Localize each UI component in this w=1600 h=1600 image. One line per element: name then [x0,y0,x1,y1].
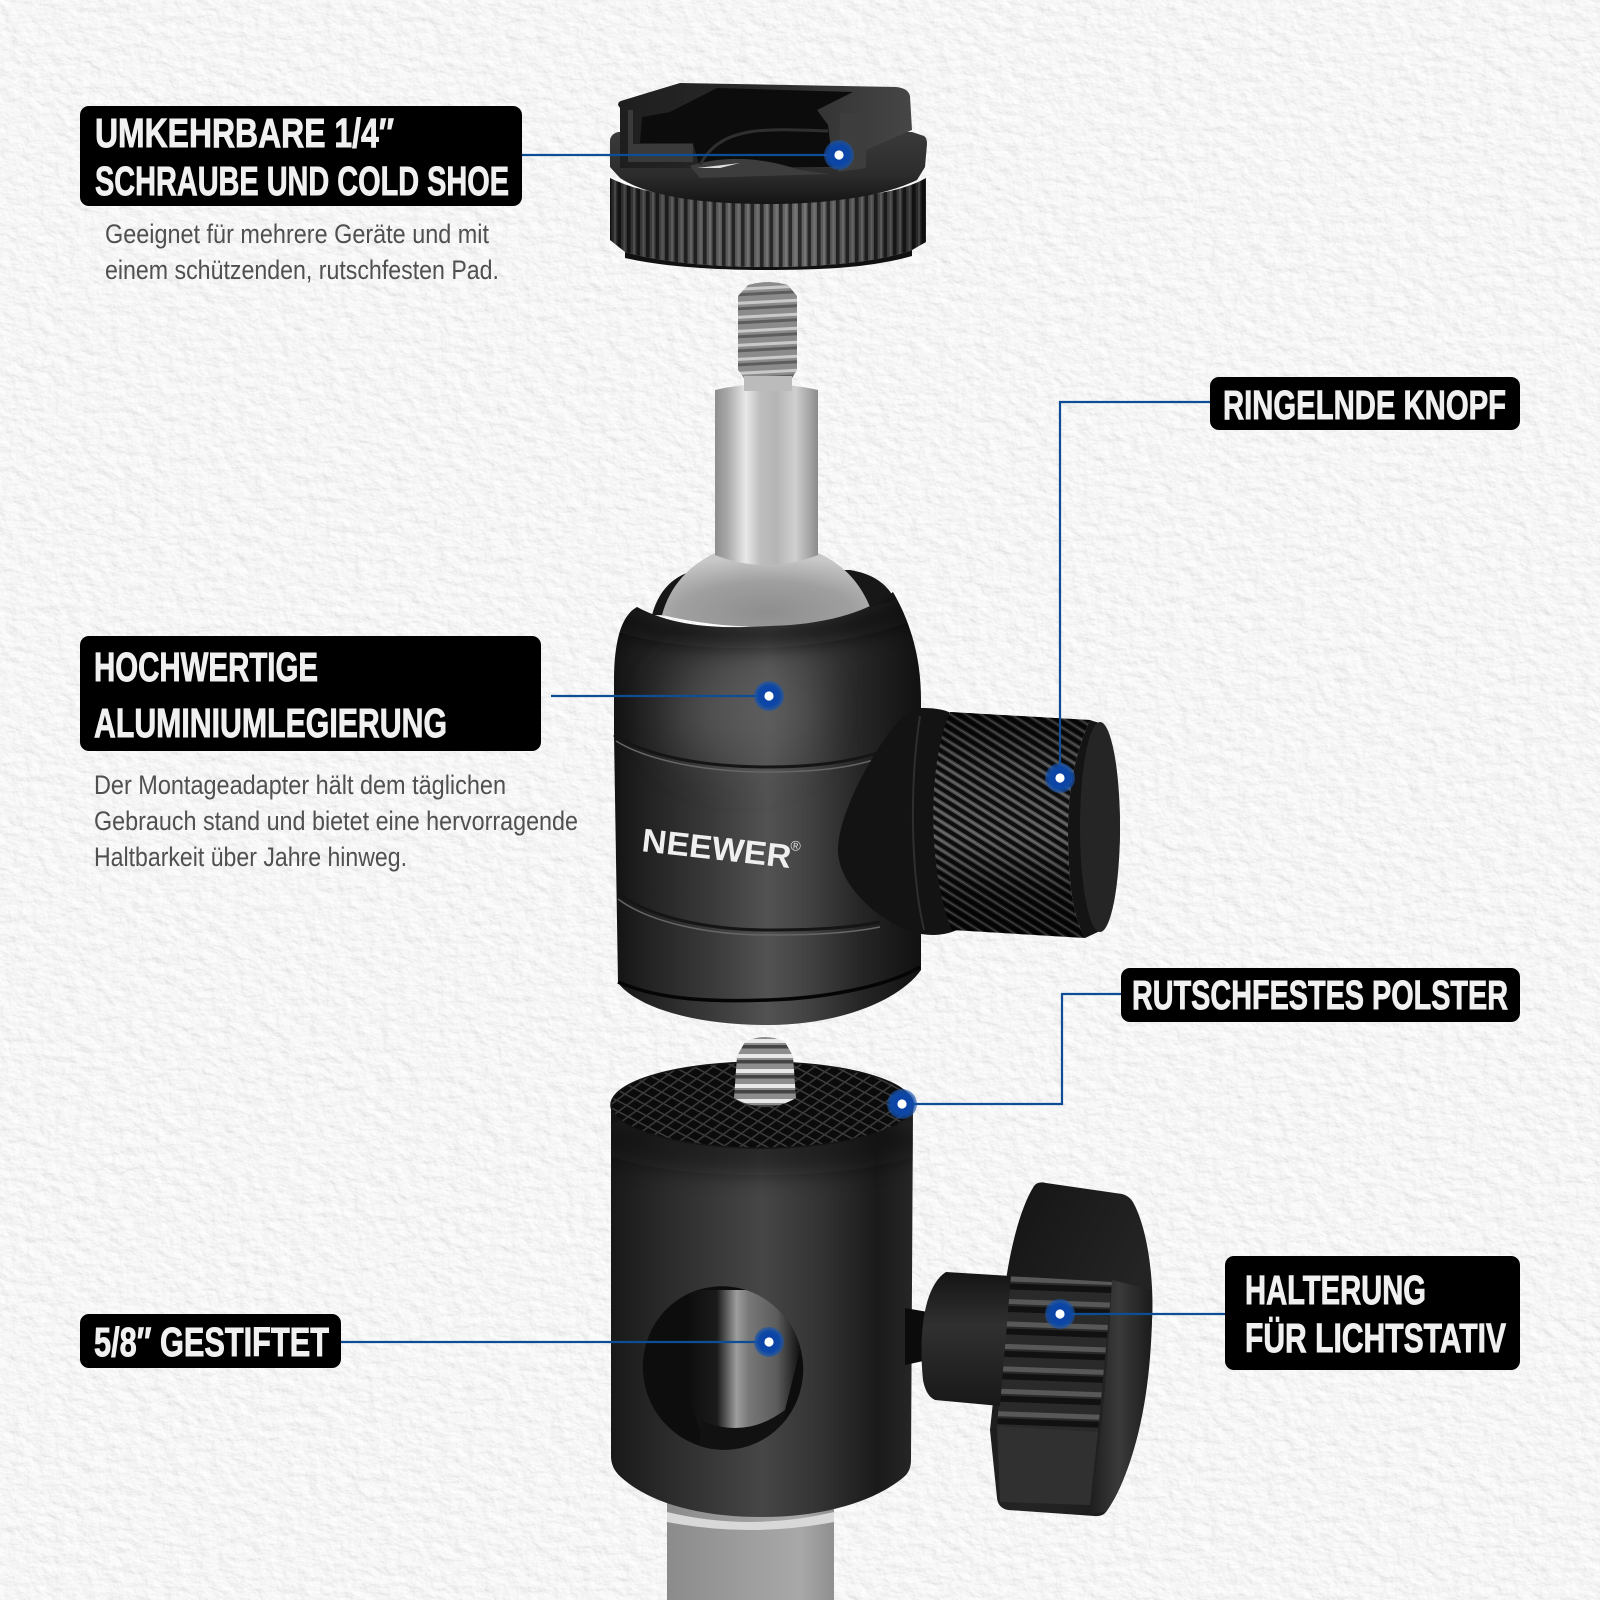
body [614,592,921,1025]
lower groove [618,893,880,930]
product: lock knob [921,1182,1152,1516]
product: cold shoe adapter [610,83,927,270]
marker: pad [887,1089,917,1119]
knob ribs [997,1276,1112,1432]
upper groove [614,735,880,767]
threaded bolt [738,282,797,378]
rail highlight [628,110,693,162]
mounting stud [734,1037,796,1107]
label: reversible screw and cold shoe [80,106,522,206]
callout line: cold shoe [522,154,839,156]
marker: cold shoe [824,140,854,170]
callout line: pad [902,994,1121,1104]
cylinder body [611,1105,913,1517]
label: aluminium alloy [80,636,541,751]
text: cold shoe description: einem schützenden, rutschfesten Pad. [105,255,499,285]
callout line: aluminium [551,695,769,697]
label: reversible screw and cold shoe: SCHRAUBE UND COLD SHOE [95,158,509,204]
body shading [600,600,930,762]
knob rim [1086,1280,1152,1514]
text: cold shoe description [105,219,499,285]
5/8 inch hole [640,1285,810,1455]
text: aluminium description: Haltbarkeit über Jahre hinweg. [94,842,407,872]
knob collar [838,708,957,935]
label: reversible screw and cold shoe: UMKEHRBARE 1/4″ [95,110,394,156]
label: aluminium alloy: ALUMINIUMLEGIERUNG [94,700,447,746]
base gap [618,967,920,1001]
silver post [715,384,818,565]
shoe opening [640,88,853,168]
ball [662,553,872,627]
marker: 5/8 pin [754,1327,784,1357]
knurled grip [933,712,1090,938]
socket back rim [652,570,903,620]
knob cap [1068,720,1120,938]
label: aluminium alloy: HOCHWERTIGE [94,644,318,690]
label: light stand mount: FÜR LICHTSTATIV [1245,1315,1506,1361]
label: ring knob [1210,377,1520,430]
label: 5/8 inch pin: 5/8″ GESTIFTET [94,1319,329,1365]
NEEWER logo: ® [790,837,802,854]
NEEWER logo: NEEWER [640,821,794,875]
collar [610,132,927,204]
callout line: stand mount [1060,1313,1225,1315]
marker: stand mount [1045,1299,1075,1329]
text: aluminium description: Gebrauch stand und bietet eine hervorragende [94,806,578,836]
marker: knob [1045,763,1075,793]
label: light stand mount: HALTERUNG [1245,1267,1426,1313]
product: light stand pole [667,1500,834,1600]
text: cold shoe description: Geeignet für mehrere Geräte und mit [105,219,489,249]
label: 5/8 inch pin [80,1314,341,1368]
anti-slip pad [611,1062,913,1148]
side screw [905,1308,928,1365]
text: aluminium description: Der Montageadapter hält dem täglichen [94,770,506,800]
cylinder shading [626,1118,913,1182]
callout line: knob [1060,402,1210,778]
knob neck [921,1272,1011,1406]
text: aluminium description [94,770,578,872]
knurled ring [610,178,926,267]
marker: aluminium [754,681,784,711]
label: light stand mount [1225,1256,1520,1370]
shoe top plate [618,83,912,168]
product: lower cylinder mount [592,1037,932,1517]
callout line: 5/8 pin [341,1341,769,1343]
product: ball head [600,282,930,1025]
knob head [990,1182,1152,1516]
product: ball head knob [838,708,1120,938]
